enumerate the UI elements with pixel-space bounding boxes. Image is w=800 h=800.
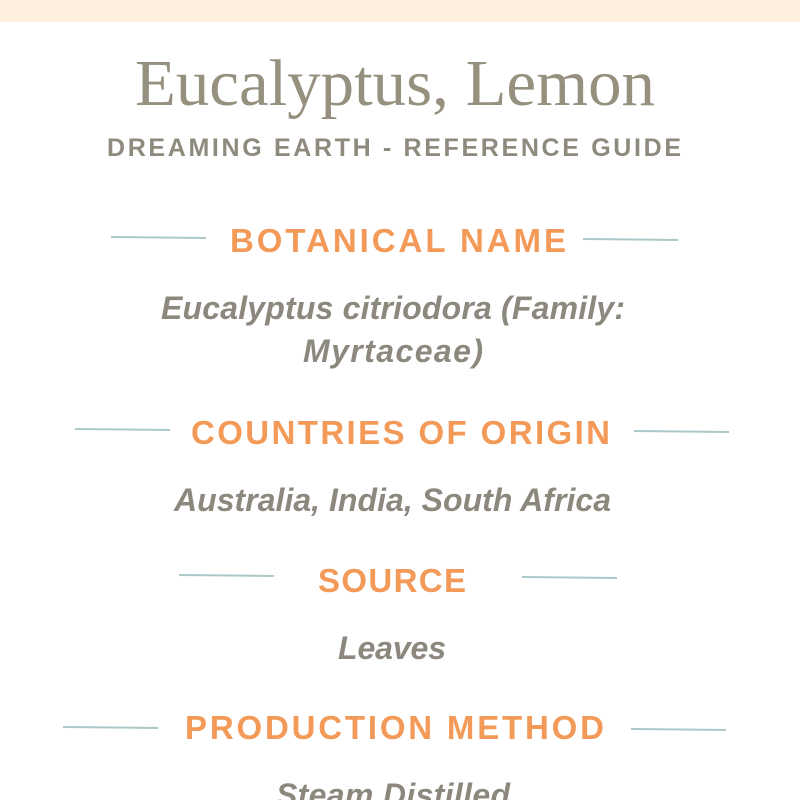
text: botanical name value: Eucalyptus citriodora (Family: [161,290,625,326]
section: botanical name [111,222,678,369]
section: production method [63,709,726,800]
heading: botanical name: BOTANICAL NAME [230,222,566,259]
heading: countries of origin: COUNTRIES OF ORIGIN [191,414,610,451]
section: countries of origin [75,414,729,518]
title: Eucalyptus, Lemon [135,47,655,120]
top cream band [0,0,800,22]
section: source [179,562,617,666]
text: source value: Leaves [338,630,446,666]
heading: production method: PRODUCTION METHOD [185,709,604,746]
text: botanical name value [161,290,625,369]
subtitle: DREAMING EARTH - REFERENCE GUIDE [107,134,681,162]
text: botanical name value: Myrtaceae) [303,333,483,369]
text: countries value: Australia, India, South Africa [173,482,611,518]
heading: source: SOURCE [318,562,466,599]
